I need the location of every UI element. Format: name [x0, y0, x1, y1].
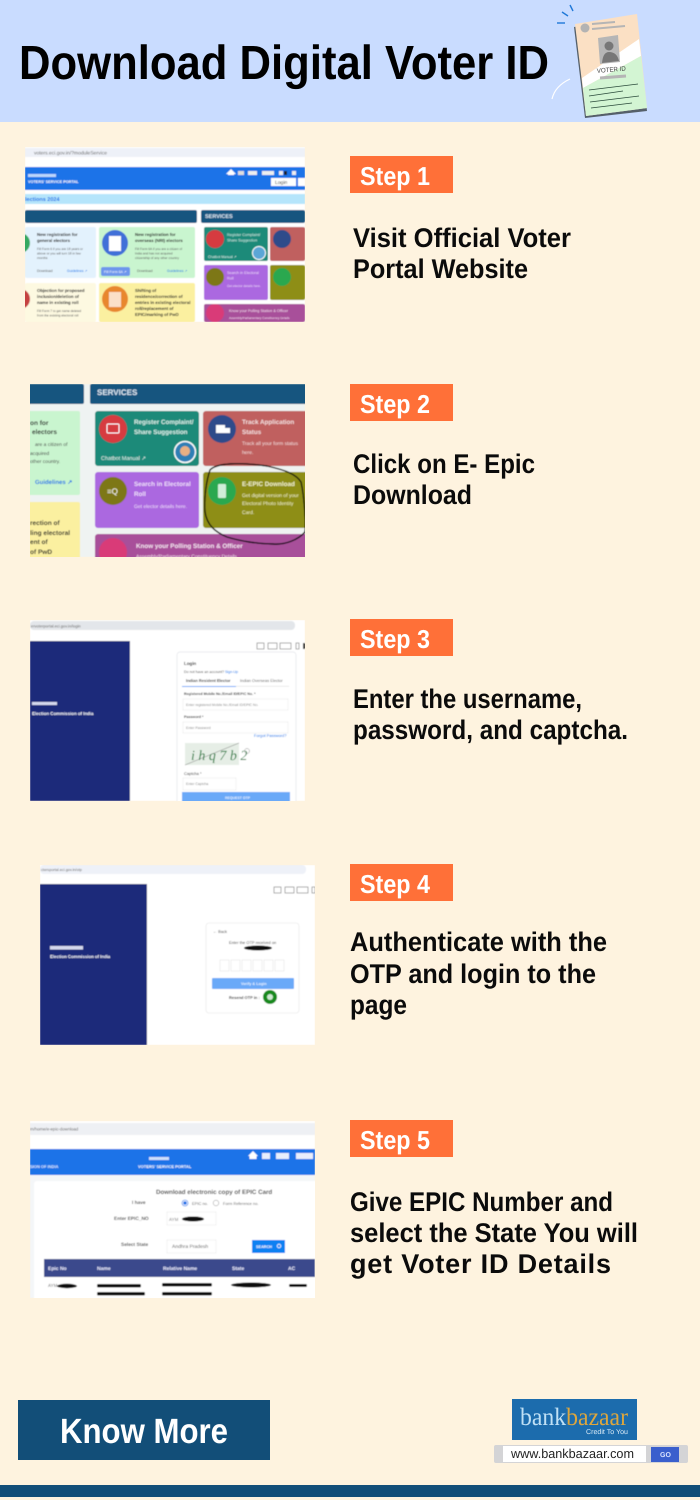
screenshot: epic download form: VOTERS' SERVICE PORTAL [138, 1164, 192, 1169]
screenshot: voter portal home page: from the existing electoral roll [37, 314, 79, 318]
step 1 badge: Step 1 [360, 161, 430, 191]
website search box: www.bankbazaar.com [510, 1446, 634, 1461]
screenshot: login page: i h q 7 b 2 [191, 749, 247, 764]
screenshot: services with e-epic circled: of PwD [30, 549, 52, 556]
screenshot: voter portal home page: months [37, 256, 48, 260]
know more button: Know More [60, 1412, 228, 1451]
screenshot: otp page: ← Back [213, 929, 227, 934]
screenshot: epic download form: Name [97, 1266, 111, 1272]
screenshot: services with e-epic circled: Card. [242, 510, 254, 516]
screenshot: otp page: ctersportal.eci.gov.in/otp [41, 868, 82, 872]
screenshot: services with e-epic circled: Status [242, 429, 262, 436]
screenshot: login page: Indian Overseas Elector [240, 678, 283, 683]
screenshot: voter portal home page: Objection for proposed [37, 288, 85, 293]
screenshot: voter portal home page: Login [275, 180, 287, 186]
screenshot: services with e-epic circled [26, 384, 310, 566]
step 4 text [350, 927, 607, 1020]
screenshot: services with e-epic circled: Get digital version of your [242, 493, 299, 499]
screenshot: services with e-epic circled: Know your Polling Station & Officer [136, 543, 243, 550]
screenshot: services with e-epic circled: other country. [30, 459, 60, 465]
screenshot: voter portal home page: Fill Form 7 to get name deleted [37, 309, 81, 313]
screenshot: login page: Login [184, 661, 196, 666]
step 1 text: Portal Website [353, 254, 528, 284]
step 4 text: page [350, 990, 407, 1020]
bankbazaar logo: Credit To You [586, 1428, 628, 1436]
bankbazaar logo: bankbazaar [520, 1404, 629, 1431]
screenshot: voter portal home page: Download [37, 269, 53, 273]
screenshot: services with e-epic circled: Chatbot Manual ↗ [101, 456, 146, 462]
screenshot: voter portal home page: Search in Electoral [227, 271, 259, 275]
screenshot: voter portal home page: general electors [37, 238, 71, 243]
step 3 text: password, and captcha. [353, 715, 628, 745]
screenshot: voter portal home page: overseas (NRI) electors [135, 238, 183, 243]
screenshot: voter portal home page: Know your Polling Station & Officer [229, 309, 289, 313]
screenshot: epic download form: AYM [169, 1217, 179, 1222]
screenshot: voter portal home page: Fill Form 6A ↗ [104, 270, 127, 274]
screenshot: login page: Enter Captcha [186, 782, 208, 786]
step 2 text [353, 449, 535, 510]
screenshot: login page: Enter Password [186, 726, 211, 730]
screenshot: voter portal home page: Get elector details here. [227, 284, 261, 288]
screenshot: voter portal home page: citizenship of any other country [135, 256, 179, 260]
step 3 text: Enter the username, [353, 684, 582, 714]
screenshot: login page: Election Commission of India [32, 711, 94, 716]
screenshot: otp page: Resend OTP in : [229, 995, 260, 1000]
screenshot: services with e-epic circled: are a citizen of [35, 442, 68, 448]
screenshot: login page: Captcha * [184, 771, 202, 776]
screenshot: voter portal home page: Chatbot Manual ↗ [208, 255, 237, 259]
screenshot: services with e-epic circled: ent of [30, 539, 49, 546]
screenshot: services with e-epic circled: Track all your form status [242, 441, 298, 447]
screenshot: services with e-epic circled: ling electoral [30, 530, 70, 537]
screenshot: services with e-epic circled: E-EPIC Download [242, 481, 295, 488]
screenshot: voter portal home page: EPIC/marking of PwD [135, 312, 179, 317]
step 5 badge [350, 1120, 453, 1157]
screenshot: otp page: Enter the OTP received on [229, 940, 276, 945]
know more button [18, 1400, 270, 1460]
screenshot: voter portal home page: entries in existing electoral [135, 300, 190, 305]
header banner [0, 0, 700, 122]
screenshot: epic download form: Relative Name [163, 1266, 197, 1272]
screenshot: login page: ervoterportal.eci.gov.in/login [31, 624, 81, 628]
screenshot: epic download form: Andhra Pradesh [172, 1244, 208, 1250]
screenshot: epic download form: Select State [121, 1242, 149, 1248]
screenshot: epic download form: AYM [48, 1283, 58, 1288]
screenshot: services with e-epic circled: Track Application [242, 419, 294, 426]
screenshot: login page [30, 620, 305, 807]
step 2 badge: Step 2 [360, 389, 430, 419]
step 4 text: OTP and login to the [350, 959, 596, 989]
screenshot: epic download form [30, 1121, 324, 1301]
screenshot: services with e-epic circled: acquired [30, 451, 49, 457]
screenshot: epic download form: m/home/e-epic-download [30, 1126, 79, 1132]
screenshot: voter portal home page: Guidelines ↗ [67, 269, 88, 273]
screenshot: login page: Do not have an account? Sign-Up [184, 670, 238, 674]
screenshot: epic download form: AC [288, 1266, 296, 1272]
screenshot: epic download form: I have [132, 1200, 146, 1206]
screenshot: services with e-epic circled: rection of [30, 520, 60, 527]
website search box: GO [660, 1452, 671, 1459]
screenshot: voter portal home page: India and has not acquired [135, 252, 173, 256]
screenshot: epic download form: Download electronic copy of EPIC Card [156, 1189, 272, 1196]
step 5 text: select the State You will [350, 1218, 638, 1248]
screenshot: voter portal home page: New registration for [37, 232, 78, 237]
screenshot: voter portal home page: name in existing roll [37, 300, 79, 305]
screenshot: epic download form: EPIC no. [192, 1201, 208, 1206]
screenshot: login page: Enter registered Mobile No./Email ID/EPIC No. [186, 703, 258, 707]
screenshot: epic download form: Form Reference no. [223, 1201, 259, 1206]
step 5 text [350, 1187, 638, 1279]
step 2 badge [350, 384, 453, 421]
bankbazaar logo [512, 1399, 637, 1440]
screenshot: voter portal home page: Fill Form 6 if you are 18 years or [37, 247, 84, 251]
screenshot: services with e-epic circled: Electoral Photo Identity [242, 501, 294, 507]
screenshot: voter portal home page: SERVICES [205, 214, 233, 220]
screenshot: voter portal home page [10, 147, 305, 322]
step 4 text: Authenticate with the [350, 927, 607, 957]
step 3 badge [350, 619, 453, 656]
screenshot: login page: REQUEST OTP [225, 796, 251, 800]
screenshot: services with e-epic circled: Register Complaint/ [134, 419, 194, 426]
screenshot: voter portal home page: Register Complaint/ [227, 233, 261, 237]
screenshot: services with e-epic circled: electors [32, 429, 57, 436]
screenshot: otp page [40, 865, 315, 1045]
screenshot: voter portal home page: Shifting of [135, 288, 157, 293]
screenshot: voter portal home page: above or you will turn 18 in few [37, 252, 81, 256]
screenshot: otp page: Verify & Login [241, 982, 267, 986]
screenshot: voter portal home page: Fill Form 6A if you are a citizen of [135, 247, 182, 251]
screenshot: epic download form: Epic No [48, 1266, 67, 1272]
screenshot: voter portal home page: Roll [227, 276, 234, 280]
screenshot: voter portal home page: voters.eci.gov.in/?moduleService [34, 150, 107, 156]
screenshot: services with e-epic circled: SERVICES [97, 388, 138, 397]
icon: voter id card [552, 5, 647, 118]
screenshot: login page: Indian Resident Elector [186, 678, 231, 683]
icon: voter id card: VOTER ID [597, 65, 626, 75]
step 4 badge: Step 4 [360, 869, 430, 899]
screenshot: voter portal home page: roll/replacement of [135, 306, 174, 311]
screenshot: otp page: Election Commission of India [50, 954, 111, 959]
screenshot: services with e-epic circled: Roll [134, 491, 146, 498]
step 1 badge [350, 156, 453, 193]
screenshot: voter portal home page: Download [137, 269, 153, 273]
screenshot: services with e-epic circled: Share Suggestion [134, 429, 188, 436]
screenshot: voter portal home page: VOTERS' SERVICE PORTAL [28, 180, 79, 184]
screenshot: epic download form: State [232, 1266, 244, 1272]
screenshot: services with e-epic circled: Search in Electoral [134, 481, 191, 488]
screenshot: epic download form: Enter EPIC_NO [114, 1216, 149, 1222]
screenshot: epic download form: SION OF INDIA [30, 1164, 59, 1169]
screenshot: voter portal home page: Assembly/Parliamentary Constituency Details [229, 316, 290, 320]
screenshot: login page: Registered Mobile No./Email ID/EPIC No. * [184, 692, 256, 696]
screenshot: voter portal home page: lections 2024 [25, 197, 60, 203]
screenshot: login page: Password * [184, 715, 204, 719]
screenshot: services with e-epic circled: Get elector details here. [134, 504, 187, 510]
step 1 text: Visit Official Voter [353, 223, 571, 253]
screenshot: services with e-epic circled: here. [242, 450, 253, 456]
screenshot: voter portal home page: inclusion/deletion of [37, 294, 79, 299]
screenshot: voter portal home page: residence/correction of [135, 294, 183, 299]
step 5 text: Give EPIC Number and [350, 1187, 613, 1217]
step 5 badge: Step 5 [360, 1125, 430, 1155]
screenshot: voter portal home page: New registration for [135, 232, 176, 237]
screenshot: voter portal home page: Guidelines ↗ [167, 269, 188, 273]
screenshot: voter portal home page: Share Suggestion [227, 238, 257, 242]
screenshot: services with e-epic circled: ≡Q [107, 487, 118, 496]
screenshot: login page: Forgot Password? [254, 733, 287, 738]
website search box [494, 1445, 688, 1463]
step 2 text: Download [353, 480, 472, 510]
step 3 badge: Step 3 [360, 624, 430, 654]
step 3 text [353, 684, 628, 745]
screenshot: epic download form: SEARCH [256, 1245, 272, 1249]
screenshot: services with e-epic circled: Guidelines ↗ [35, 479, 72, 486]
screenshot: services with e-epic circled: Assembly/Parliamentary Constituency Details [136, 554, 237, 560]
title: Download Digital Voter ID [19, 37, 549, 90]
screenshot: services with e-epic circled: on for [30, 420, 49, 427]
step 4 badge [350, 864, 453, 901]
step 1 text [353, 223, 571, 284]
step 5 text: get Voter ID Details [350, 1249, 611, 1279]
step 2 text: Click on E- Epic [353, 449, 535, 479]
